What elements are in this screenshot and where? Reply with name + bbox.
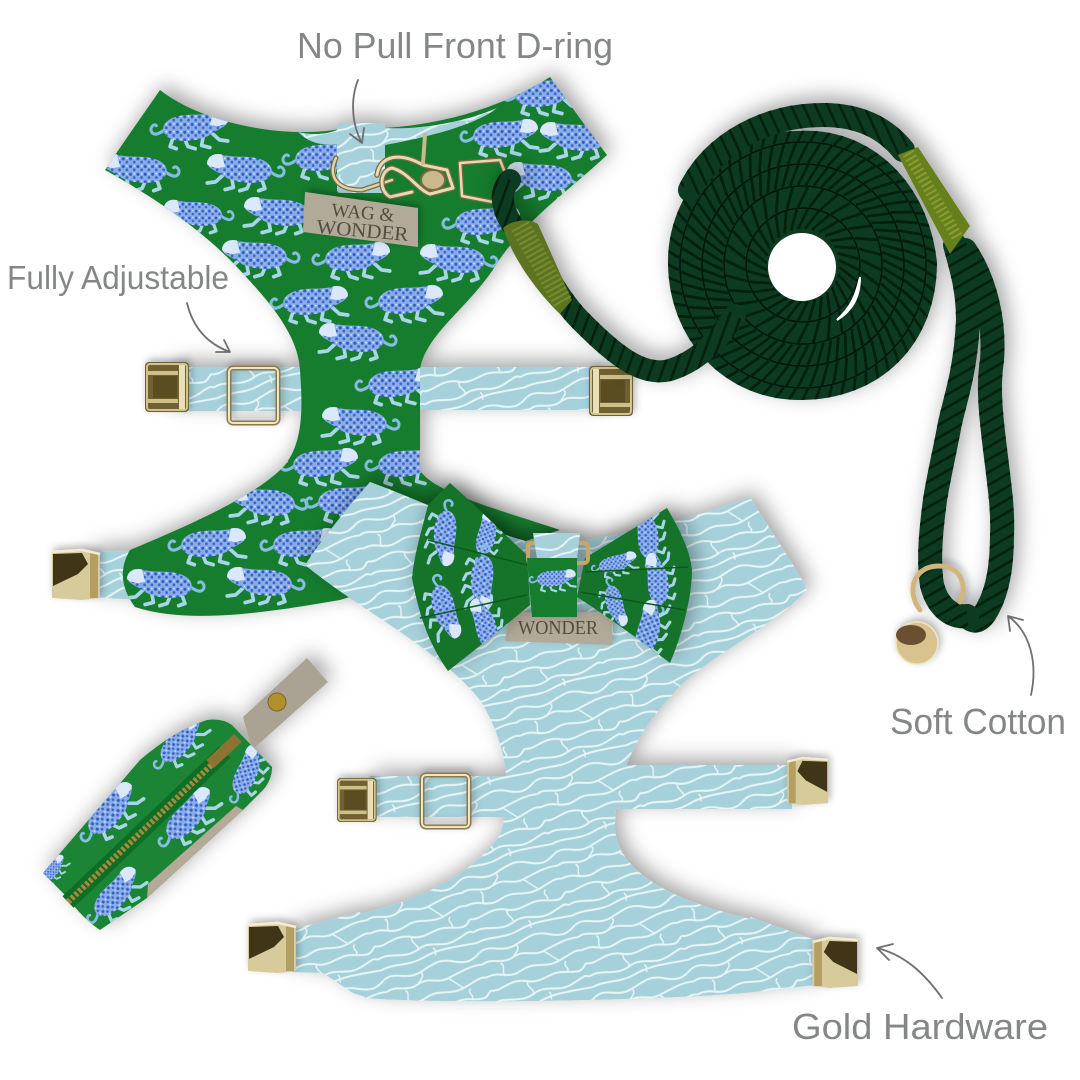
buckle: green harness lower left [52, 550, 100, 600]
swivel loop [460, 160, 512, 204]
strap: blue harness right [610, 765, 792, 809]
buckle: green harness left [145, 362, 189, 412]
hook latch [423, 135, 425, 163]
snap [268, 693, 286, 711]
tag: leather label on blue harness [505, 612, 612, 645]
arrow: buckle [877, 944, 942, 998]
strap: green harness lower left [90, 550, 140, 600]
bow tie [412, 483, 692, 671]
hook body [377, 157, 453, 197]
strap: green harness chest right [410, 367, 595, 410]
slider: blue harness [422, 775, 469, 827]
strap: blue harness lower left [290, 912, 365, 997]
coil centre hole [768, 233, 836, 301]
buckle: blue harness lower left [248, 923, 296, 973]
D-ring tab [337, 123, 385, 193]
pouch body [43, 720, 272, 930]
leash: rope, coil and wraps [503, 94, 1002, 621]
harness body: wave print [305, 482, 807, 1001]
buckle: blue harness right [787, 758, 828, 805]
coil [660, 127, 952, 406]
label text: WONDER [518, 617, 599, 639]
harness body: leopard print [105, 77, 607, 616]
bow leopards [422, 499, 676, 654]
pouch tab [243, 658, 328, 750]
tag: leather label on green harness [303, 192, 418, 247]
bow knot [527, 558, 577, 617]
charm dark inlay [896, 625, 926, 645]
D ring on tab [333, 158, 392, 190]
rope to harness [503, 180, 735, 371]
rope top arc [690, 115, 903, 190]
green harness hardware [52, 362, 633, 600]
coil slit [837, 277, 860, 320]
neck lining right [385, 108, 497, 145]
zipper [68, 738, 238, 902]
strap: blue harness left [370, 776, 510, 817]
leopard pattern on harness [102, 78, 617, 606]
caption: No Pull Front D-ring: No Pull Front D-ring [297, 25, 613, 66]
caption: Gold Hardware: Gold Hardware [792, 1006, 1048, 1047]
bow wings [412, 483, 692, 671]
bow fabric tab [533, 533, 580, 558]
blue harness [290, 482, 815, 1001]
buckle: blue harness left [337, 778, 377, 822]
key ring and charm [896, 566, 963, 664]
pouch leopards [43, 722, 270, 924]
label text second line: WONDER [316, 216, 410, 246]
arrow: D-ring [350, 80, 364, 143]
blue harness hardware [248, 758, 858, 988]
bow D-ring [528, 543, 588, 563]
olive wrap upper [898, 147, 970, 254]
poop bag pouch [31, 658, 328, 934]
buckle: blue harness lower right [812, 938, 858, 988]
charm [896, 622, 938, 664]
strap: blue harness lower right [750, 917, 815, 990]
arrow: rope [1008, 616, 1033, 695]
rope hand loop [930, 245, 1002, 621]
bow folds [420, 540, 688, 618]
label text: WAG & [331, 200, 395, 226]
buckle: green harness right [589, 366, 633, 416]
pouch side label [147, 806, 243, 898]
strap: green harness chest left [170, 367, 310, 411]
ring [913, 566, 963, 610]
caption: Soft Cotton: Soft Cotton [890, 701, 1066, 742]
caption: Fully Adjustable: Fully Adjustable [7, 259, 229, 296]
arrow: adjustable strap [187, 303, 230, 352]
slider: green harness [229, 368, 278, 423]
green harness [90, 77, 617, 616]
olive wrap lower [503, 221, 572, 314]
snap hook [333, 135, 512, 204]
neck lining left [298, 130, 337, 144]
